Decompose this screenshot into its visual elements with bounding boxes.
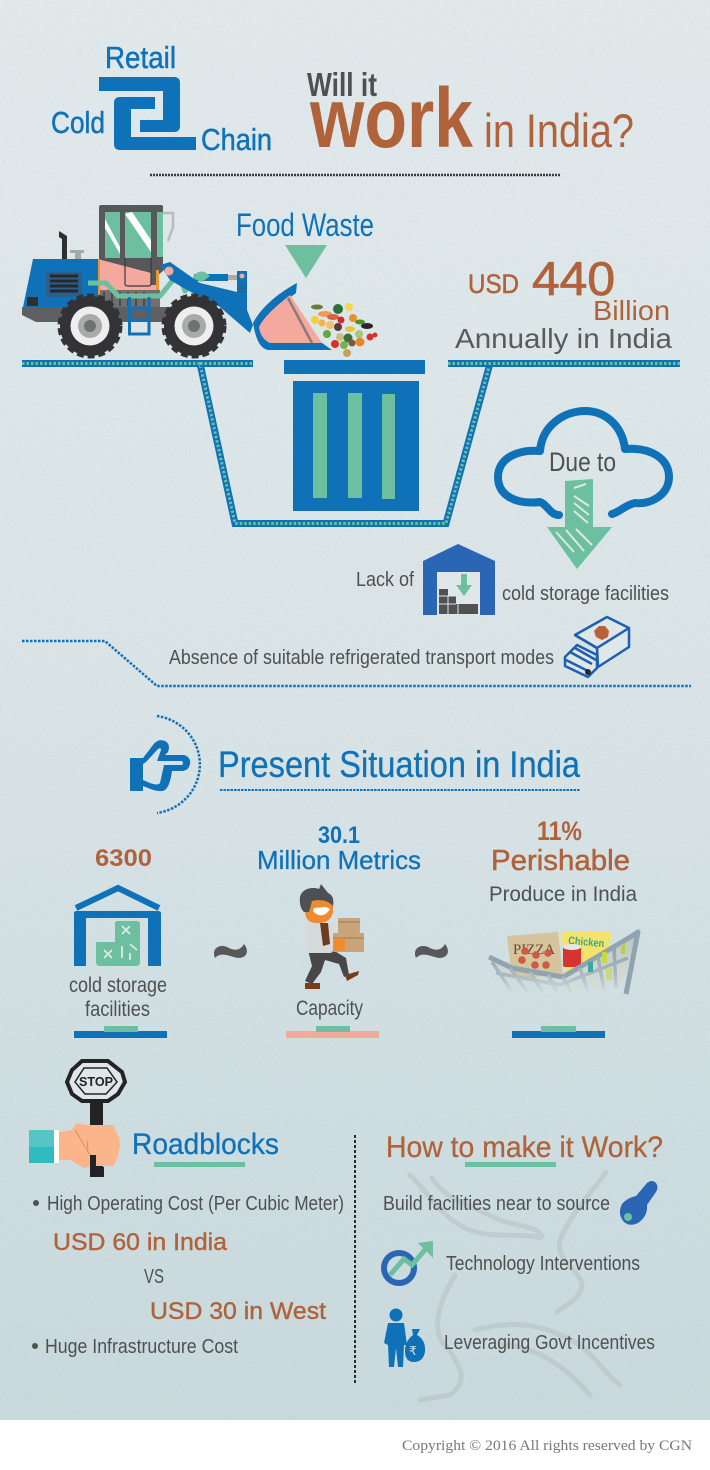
cause: lack of cold storage facilities — [356, 544, 669, 615]
heading text: Present Situation in India — [218, 744, 580, 785]
dotted section divider — [22, 641, 691, 686]
legs — [305, 950, 349, 984]
exhaust pipe — [59, 231, 67, 261]
text: Lack of: Lack of — [356, 569, 414, 591]
logo word: Chain: Chain — [201, 122, 272, 157]
heading: How to make it Work?: How to make it Work? — [386, 1131, 663, 1164]
bullet: high operating cost: High Operating Cost (Per Cubic Meter) — [47, 1193, 344, 1215]
pizza box: PIZZA — [513, 942, 555, 958]
ground and pit outline — [22, 364, 680, 524]
stat prefix: USD — [468, 269, 519, 299]
heading underline — [154, 1162, 245, 1167]
chicken box — [561, 932, 612, 972]
stat: USD 60 in India: USD 60 in India — [53, 1229, 228, 1256]
icon: wheel loader — [22, 205, 332, 357]
cause: absence of refrigerated transport — [169, 617, 629, 677]
shirt — [305, 923, 333, 953]
icon: growth chart — [384, 1241, 433, 1283]
logo word: Retail: Retail — [105, 40, 176, 75]
title: Will it work in India? — [307, 66, 634, 165]
text: Capacity: Capacity — [296, 997, 363, 1020]
text: build facilities: Build facilities near to source — [383, 1193, 610, 1215]
icon: tilde connector left — [214, 944, 247, 958]
background sketch: joined hands — [410, 1172, 620, 1400]
icon: thumbs up pointing right — [130, 740, 190, 791]
smile — [313, 907, 330, 915]
title word: work: work — [309, 71, 473, 165]
text: cold storage facilities: cold storage facilities — [502, 583, 669, 605]
icon: man with rupee bag: ₹ — [409, 1344, 417, 1358]
panel: 30.1 Million Metrics capacity — [257, 822, 421, 1038]
head — [305, 900, 333, 923]
text: VS: VS — [144, 1266, 164, 1288]
footer: copyright: Copyright © 2016 All rights reserved by CGN — [402, 1438, 692, 1454]
hood — [22, 259, 99, 312]
hair — [300, 884, 333, 912]
icon: spilled food pile — [311, 303, 378, 357]
hand-drawn arrow — [547, 479, 612, 569]
stat: 30.1: 30.1 — [318, 822, 360, 849]
stat period: Annually in India — [455, 323, 672, 354]
text: cold storage facilities: cold storage — [69, 974, 167, 997]
cab — [99, 205, 163, 271]
cloud outline — [498, 411, 669, 515]
stat: Perishable: Perishable — [491, 845, 630, 877]
text: absence of transport modes: Absence of suitable refrigerated transport modes — [169, 647, 554, 669]
chassis — [22, 307, 175, 322]
heading: Retail Cold Chain logo — [51, 40, 272, 157]
icon: wrench — [620, 1181, 658, 1225]
text: Produce in India: Produce in India — [489, 883, 637, 906]
heading underline — [465, 1162, 556, 1167]
pizza box — [507, 932, 563, 978]
heading underline — [220, 789, 580, 791]
icon: shopping cart of food — [489, 932, 638, 994]
shoes — [305, 971, 359, 989]
text: leveraging govt incentives: Leveraging Govt Incentives — [444, 1332, 655, 1354]
base bar — [512, 1026, 605, 1038]
icon: hand holding stop sign — [29, 1061, 125, 1177]
cart basket — [489, 932, 638, 994]
icon: waste bin — [284, 360, 425, 511]
bullet: huge infrastructure cost: Huge Infrastructure Cost — [45, 1336, 238, 1358]
panel: How to make it Work? — [383, 1131, 663, 1367]
base bar — [74, 1026, 167, 1038]
panel: 11% Perishable Produce in India — [489, 816, 638, 1038]
title line: in India?: in India? — [484, 104, 634, 157]
base bar — [286, 1026, 379, 1038]
icon: warehouse — [423, 544, 495, 615]
icon: man with rupee bag — [384, 1308, 425, 1367]
wheel: rear — [59, 295, 121, 357]
mirror frame — [163, 213, 173, 241]
logo word: Cold: Cold — [51, 105, 105, 140]
icon: refrigerated truck — [565, 617, 629, 677]
icon: tilde connector right — [415, 944, 448, 958]
loader arm — [160, 262, 253, 333]
wheel: front — [163, 295, 225, 357]
pink body panel — [98, 259, 157, 305]
icon: man carrying boxes — [300, 884, 364, 989]
basket shadow fill — [489, 932, 638, 994]
stat: USD 440 Billion Annually in India — [455, 252, 672, 354]
icon: cold storage warehouse — [74, 888, 161, 966]
icon: green pointer triangle — [285, 245, 327, 278]
bucket — [253, 283, 332, 350]
ladder — [130, 297, 149, 334]
title line: Will it: Will it — [307, 66, 377, 103]
heading: Present Situation in India — [130, 716, 580, 813]
stat: 11%: 11% — [537, 816, 582, 846]
stat unit: Billion — [593, 295, 670, 326]
stat: 6300: 6300 — [95, 845, 152, 872]
stat: Million Metrics: Million Metrics — [257, 845, 421, 875]
text: technology interventions: Technology Interventions — [446, 1253, 640, 1275]
label: Food Waste: Food Waste — [236, 207, 374, 243]
dotted arc — [157, 716, 200, 813]
icon: hand holding stop sign: STOP — [79, 1074, 113, 1089]
text: cold storage facilities: facilities — [85, 998, 150, 1021]
heading: Roadblocks: Roadblocks — [132, 1128, 279, 1161]
panel: Roadblocks — [29, 1061, 344, 1358]
panel: 6300 cold storage facilities — [69, 845, 167, 1038]
chicken box: Chicken — [568, 935, 605, 950]
cloud label: Due to — [549, 447, 616, 477]
logo glyph: chain link — [99, 77, 196, 150]
stat: USD 30 in West: USD 30 in West — [150, 1298, 326, 1325]
green piping — [88, 274, 186, 296]
grille — [46, 272, 82, 297]
boxes — [338, 918, 360, 933]
stat number: 440 — [532, 252, 615, 305]
callout: Due to cloud — [498, 411, 669, 569]
